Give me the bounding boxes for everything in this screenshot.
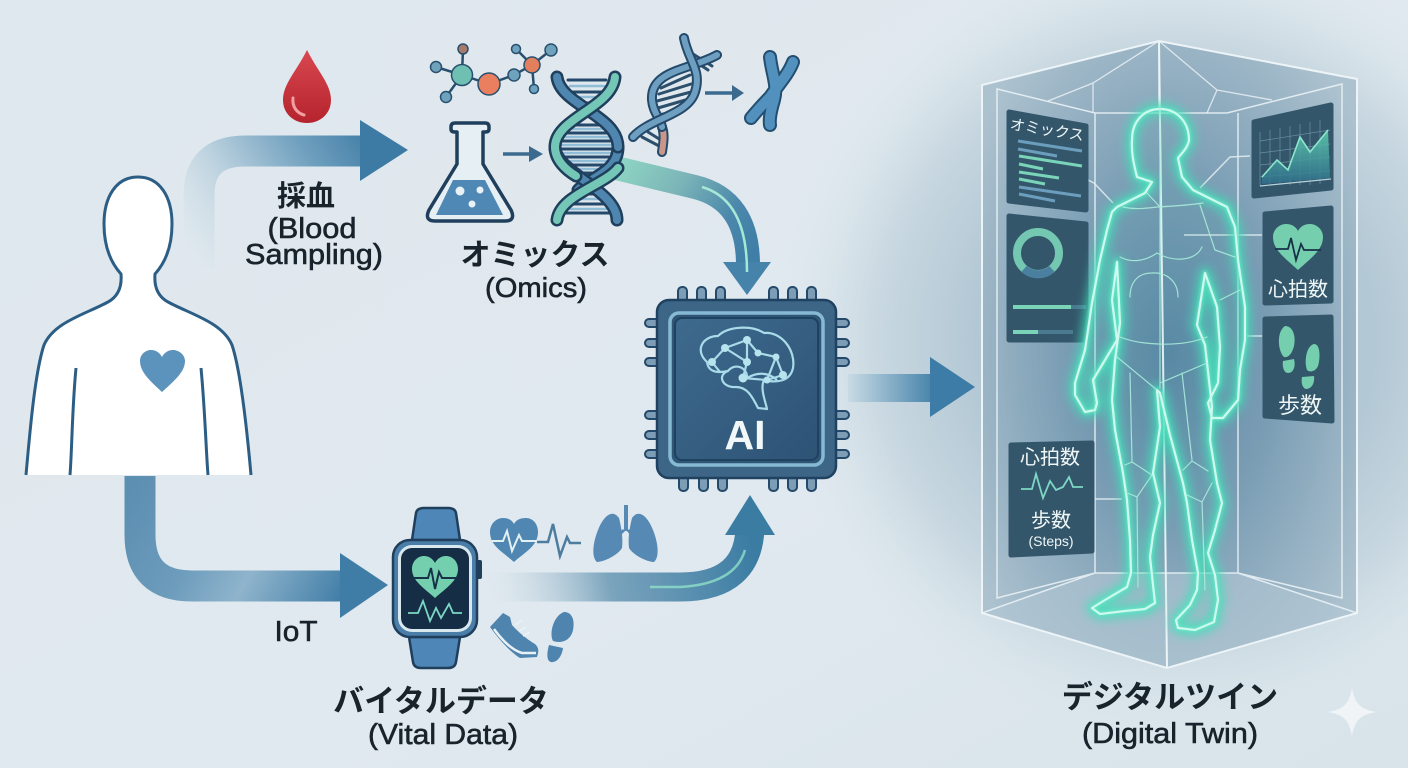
label: IoT: IoT [274, 616, 318, 648]
label: digital twin [1062, 680, 1278, 750]
label: digital twin: デジタルツイン [1062, 680, 1278, 715]
icon: sparkle [1328, 688, 1376, 736]
label: blood sampling: 採血 [277, 180, 335, 213]
icon: tilted DNA [633, 38, 717, 152]
icon: brain [701, 328, 793, 409]
panel: omics data [1009, 112, 1086, 210]
connector lines [1088, 156, 1262, 499]
arrow: DNA to chromosome [705, 85, 744, 101]
icon: heart on chest [140, 350, 185, 392]
arrow: AI to digital twin [848, 357, 975, 417]
label: blood sampling: (Blood [268, 213, 356, 245]
icon: watch heart [412, 556, 458, 598]
AI chip [645, 287, 849, 491]
panel: heart rate [1265, 208, 1331, 303]
panel: heart rate and steps [1011, 443, 1092, 555]
panel: heart rate and steps: 歩数 [1031, 509, 1071, 532]
panel: line chart [1254, 105, 1331, 196]
digital twin body [1075, 109, 1245, 630]
label: blood sampling: Sampling) [245, 239, 383, 271]
icon: lungs [593, 505, 658, 562]
label: AI: AI [724, 412, 766, 458]
panel: donut chart [1009, 216, 1086, 340]
icon: heart with pulse [490, 518, 581, 562]
arrow: person to IoT [140, 476, 388, 618]
person silhouette [26, 177, 251, 475]
panel: heart rate and steps: 心拍数 [1020, 446, 1080, 469]
panel: steps: 歩数 [1278, 393, 1322, 418]
icon: DNA helix [555, 77, 618, 220]
digital twin glass box [982, 41, 1357, 668]
label: digital twin: (Digital Twin) [1082, 718, 1258, 750]
panel: heart rate and steps: (Steps) [1028, 533, 1074, 549]
icon: blood drop [283, 50, 331, 123]
smartwatch [393, 508, 482, 668]
label: vital data: (Vital Data) [368, 719, 518, 751]
label: vital data: バイタルデータ [333, 684, 549, 719]
icon: flask [427, 123, 513, 221]
label: blood sampling [245, 180, 383, 271]
background haze behind digital twin [700, 0, 1408, 768]
panel: steps [1265, 317, 1332, 421]
arrow: person to blood sampling [199, 120, 408, 268]
label: omics [460, 239, 610, 303]
label: omics: (Omics) [485, 272, 587, 303]
icon: running shoe [490, 613, 538, 658]
label: vital data [333, 684, 549, 751]
arrow: flask to DNA [503, 146, 543, 162]
icon: molecule [430, 44, 557, 102]
panel: omics data: オミックス [1009, 116, 1085, 145]
icon: chromosome [751, 57, 793, 125]
arrow: vital data to AI [485, 495, 775, 587]
arrow: omics to AI [612, 167, 771, 295]
label: omics: オミックス [460, 239, 610, 272]
panel: heart rate: 心拍数 [1268, 278, 1328, 301]
icon: footprint [547, 612, 574, 662]
